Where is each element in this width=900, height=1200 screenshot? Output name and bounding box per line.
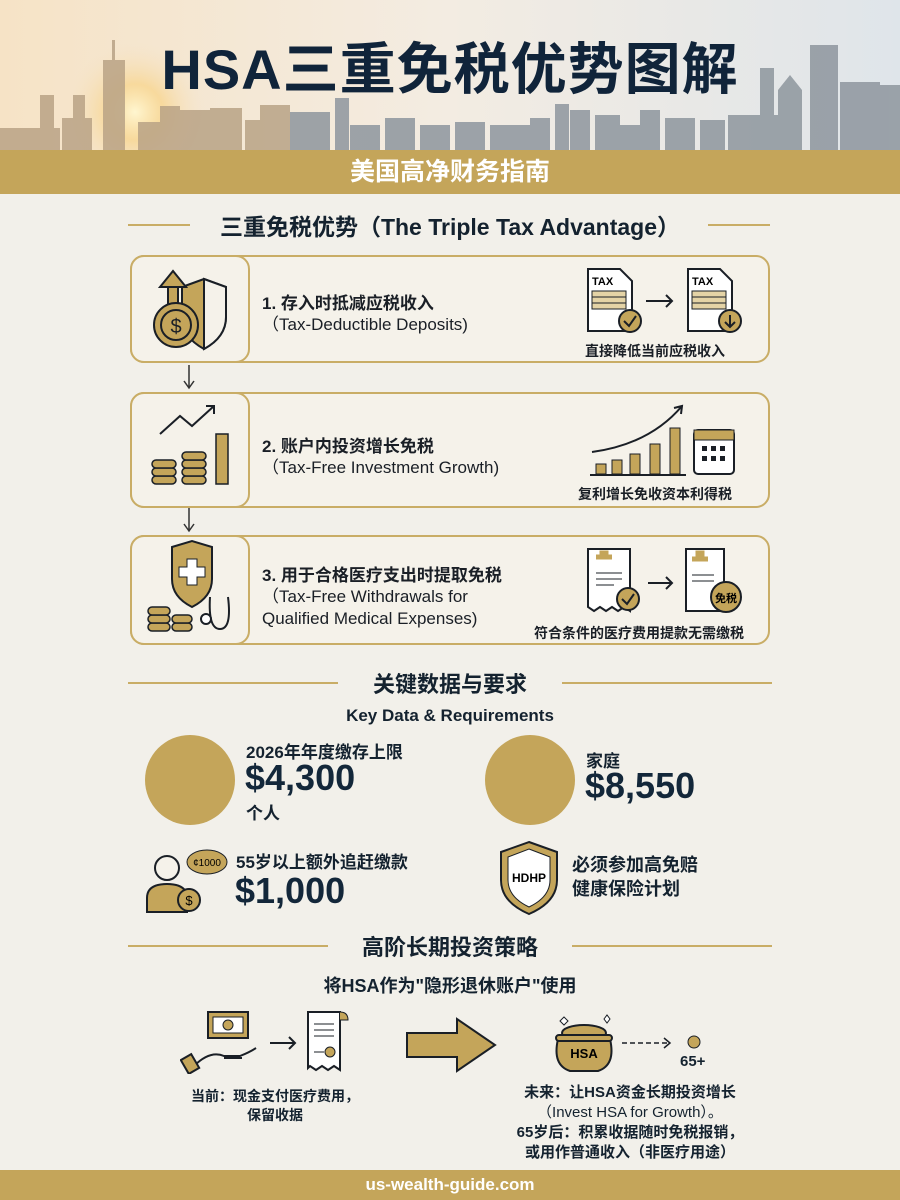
stat: family limit: 家庭 [586, 752, 620, 771]
icon: medical shield [130, 535, 250, 645]
text: step 2: 2. 账户内投资增长免税 [262, 437, 434, 456]
arrow: 2 to 3 [183, 508, 194, 532]
icon: tax forms [587, 268, 742, 333]
icon: HDHP shield: HDHP [512, 871, 546, 885]
strategy: future: 65岁后：积累收据随时免税报销， [517, 1124, 743, 1141]
icon: receipts [587, 548, 742, 613]
icon: HDHP shield [500, 841, 558, 916]
title: HSA三重免税优势图解 [161, 38, 739, 101]
arrow: 1 to 2 [183, 365, 194, 390]
stat: individual limit: $4,300 [245, 757, 355, 798]
stat: catch-up [146, 850, 408, 913]
panel 3: tax-free withdrawals [130, 535, 770, 645]
text: step 3: Qualified Medical Expenses) [262, 609, 477, 628]
requirement: HDHP: 健康保险计划 [572, 879, 680, 899]
stat: individual limit: 2026年年度缴存上限 [246, 743, 403, 762]
footer band: us-wealth-guide.com [365, 1175, 535, 1194]
strategy: future [517, 1014, 743, 1161]
icon: person with coin: $ [185, 893, 193, 908]
icon: coin and shield [130, 255, 250, 363]
subheading: key data english: Key Data & Requirements [346, 706, 554, 725]
text: step 1: （Tax-Deductible Deposits) [262, 315, 468, 334]
panel 1: tax-deductible deposits [130, 255, 770, 363]
icon: coin and shield: $ [170, 316, 182, 338]
section heading: key data: 关键数据与要求 [373, 672, 527, 697]
arrow: big gold [406, 1017, 497, 1073]
subtitle band [0, 150, 900, 194]
icon: bar chart and calendar [590, 404, 735, 476]
strategy: current [180, 1011, 359, 1123]
section heading: long-term strategy: 高阶长期投资策略 [362, 935, 538, 960]
icon: gold circle [485, 735, 575, 825]
icon: HSA pot with dashed arrow to 65+ [555, 1014, 700, 1072]
icon: tax forms: TAX [592, 276, 614, 288]
text: step 3 [262, 566, 502, 628]
strategy: future: 65+ [680, 1053, 705, 1070]
section heading: triple tax advantage: 三重免税优势（The Triple Tax Advantage） [220, 214, 680, 240]
header: skyline banner [0, 0, 900, 150]
icon: person with coin: ¢1000 [193, 858, 221, 869]
text: step 1: 1. 存入时抵减应税收入 [262, 294, 434, 313]
stat: individual limit [145, 735, 403, 825]
stat: family limit [485, 735, 695, 825]
icon: gold circle [145, 735, 235, 825]
text: step 2: （Tax-Free Investment Growth) [262, 458, 499, 477]
strategy: current: 保留收据 [247, 1107, 303, 1123]
icon: HSA pot with dashed arrow to 65+: HSA [570, 1046, 598, 1061]
text: step 3: 3. 用于合格医疗支出时提取免税 [262, 566, 502, 585]
stat: catch-up: 55岁以上额外追赶缴款 [236, 853, 408, 872]
stat: individual limit: 个人 [246, 804, 280, 823]
stat: catch-up: $1,000 [235, 870, 345, 911]
strategy: future: 或用作普通收入（非医疗用途） [525, 1144, 735, 1161]
icon: coins and growth [130, 392, 250, 508]
icon: tax forms: TAX [692, 276, 714, 288]
stat: family limit: $8,550 [585, 765, 695, 806]
requirement: HDHP [500, 841, 698, 916]
strategy: future: （Invest HSA for Growth）。 [537, 1104, 723, 1121]
panel 2: tax-free growth [130, 392, 770, 508]
text: step 2 [262, 437, 499, 477]
caption 3: 符合条件的医疗费用提款无需缴税 [534, 625, 744, 641]
subheading: stealth retirement account: 将HSA作为"隐形退休账户"使用 [323, 976, 577, 996]
caption 2: 复利增长免收资本利得税 [578, 486, 732, 502]
subtitle band: 美国高净财务指南 [350, 158, 550, 186]
footer band [0, 1170, 900, 1200]
icon: hand cash receipt [180, 1011, 348, 1074]
icon: receipts: 免税 [715, 590, 737, 606]
text: step 3: （Tax-Free Withdrawals for [262, 587, 468, 606]
strategy: current: 当前：现金支付医疗费用， [191, 1088, 359, 1104]
icon: person with coin [146, 850, 228, 913]
strategy: future: 未来：让HSA资金长期投资增长 [524, 1084, 736, 1101]
requirement: HDHP: 必须参加高免赔 [572, 855, 698, 875]
caption 1: 直接降低当前应税收入 [585, 343, 725, 359]
text: step 1 [262, 294, 468, 334]
